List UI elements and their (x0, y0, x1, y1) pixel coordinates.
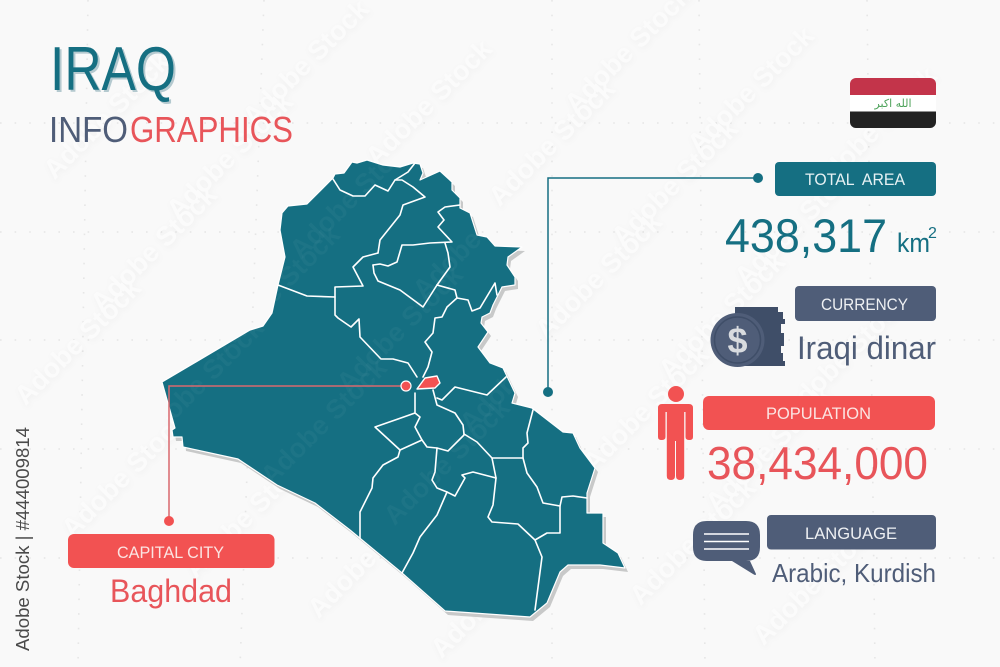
icon: coins (710, 307, 785, 367)
subtitle: INFOGRAPHICS: GRAPHICS (130, 109, 293, 150)
infographic canvas: Adobe Stock (407, 166, 545, 305)
flag of Iraq: الله اكبر (873, 97, 912, 110)
map of Iraq with provinces (162, 160, 628, 621)
infographic canvas: Adobe Stock (606, 113, 744, 252)
infographic canvas: Adobe Stock (179, 445, 317, 584)
panel: capital city (68, 534, 274, 609)
flag of Iraq (850, 78, 936, 128)
panel: language: LANGUAGE (805, 524, 897, 543)
Baghdad province highlight (417, 376, 440, 389)
panel: total area: 438,317 (725, 209, 887, 262)
panel: currency: CURRENCY (821, 295, 908, 314)
infographic canvas: Adobe Stock (747, 512, 885, 651)
subtitle: INFOGRAPHICS: INFO (49, 109, 128, 150)
panel: language (767, 515, 936, 588)
map shadow (165, 164, 628, 621)
infographic canvas: Adobe Stock (56, 405, 194, 544)
infographic canvas: Adobe Stock (653, 246, 791, 385)
infographic canvas: Adobe Stock (360, 33, 498, 172)
panel: total area: km (897, 228, 930, 258)
infographic canvas: Adobe Stock (284, 126, 422, 265)
infographic canvas: Adobe Stock (454, 299, 592, 438)
infographic canvas: Adobe Stock (805, 60, 943, 199)
infographic canvas: Adobe Stock (776, 286, 914, 425)
infographic canvas: Adobe Stock (9, 272, 147, 411)
infographic canvas: Adobe Stock (682, 20, 820, 159)
title: IRAQ: IRAQ (50, 35, 176, 104)
panel: language: Arabic, Kurdish (772, 558, 936, 588)
infographic canvas: Adobe Stock (729, 153, 867, 292)
leader line: total area (543, 173, 763, 397)
infographic canvas: Adobe Stock (425, 525, 563, 664)
infographic canvas: Adobe Stock (624, 472, 762, 611)
infographic canvas: Adobe Stock (302, 485, 440, 624)
infographic canvas: Adobe Stock (483, 73, 621, 212)
panel: capital city: Baghdad (110, 573, 232, 609)
panel: currency (795, 286, 936, 366)
infographic canvas: Adobe Stock (255, 352, 393, 491)
infographic canvas: Adobe Stock (85, 179, 223, 318)
province borders (278, 163, 587, 610)
panel: population: POPULATION (766, 404, 871, 423)
panel: population: 38,434,000 (707, 437, 928, 489)
leader line: capital city (164, 381, 411, 526)
stock credit: Adobe Stock | #444009814 (13, 427, 33, 651)
panel: capital city: CAPITAL CITY (117, 543, 224, 562)
subtitle: INFOGRAPHICS (49, 109, 293, 150)
infographic canvas: Adobe Stock (208, 219, 346, 358)
icon: speech bubble (693, 521, 760, 575)
title: IRAQ: IRAQ (52, 37, 178, 106)
panel: total area (725, 162, 937, 262)
icon: coins: $ (727, 320, 748, 361)
infographic canvas: Adobe Stock (530, 206, 668, 345)
infographic canvas: Adobe Stock (132, 312, 270, 451)
panel: total area: 2 (928, 225, 937, 242)
map landmass (162, 160, 625, 617)
infographic canvas: Adobe Stock (577, 339, 715, 478)
panel: population (703, 396, 935, 489)
infographic canvas: Adobe Stock (331, 259, 469, 398)
panel: total area: TOTAL AREA (805, 170, 906, 189)
panel: currency: Iraqi dinar (797, 330, 936, 366)
infographic canvas: Adobe Stock (378, 392, 516, 531)
icon: person (658, 386, 693, 480)
infographic canvas: Adobe Stock (38, 46, 176, 185)
infographic canvas: Adobe Stock (161, 86, 299, 225)
infographic canvas: Adobe Stock (700, 379, 838, 518)
